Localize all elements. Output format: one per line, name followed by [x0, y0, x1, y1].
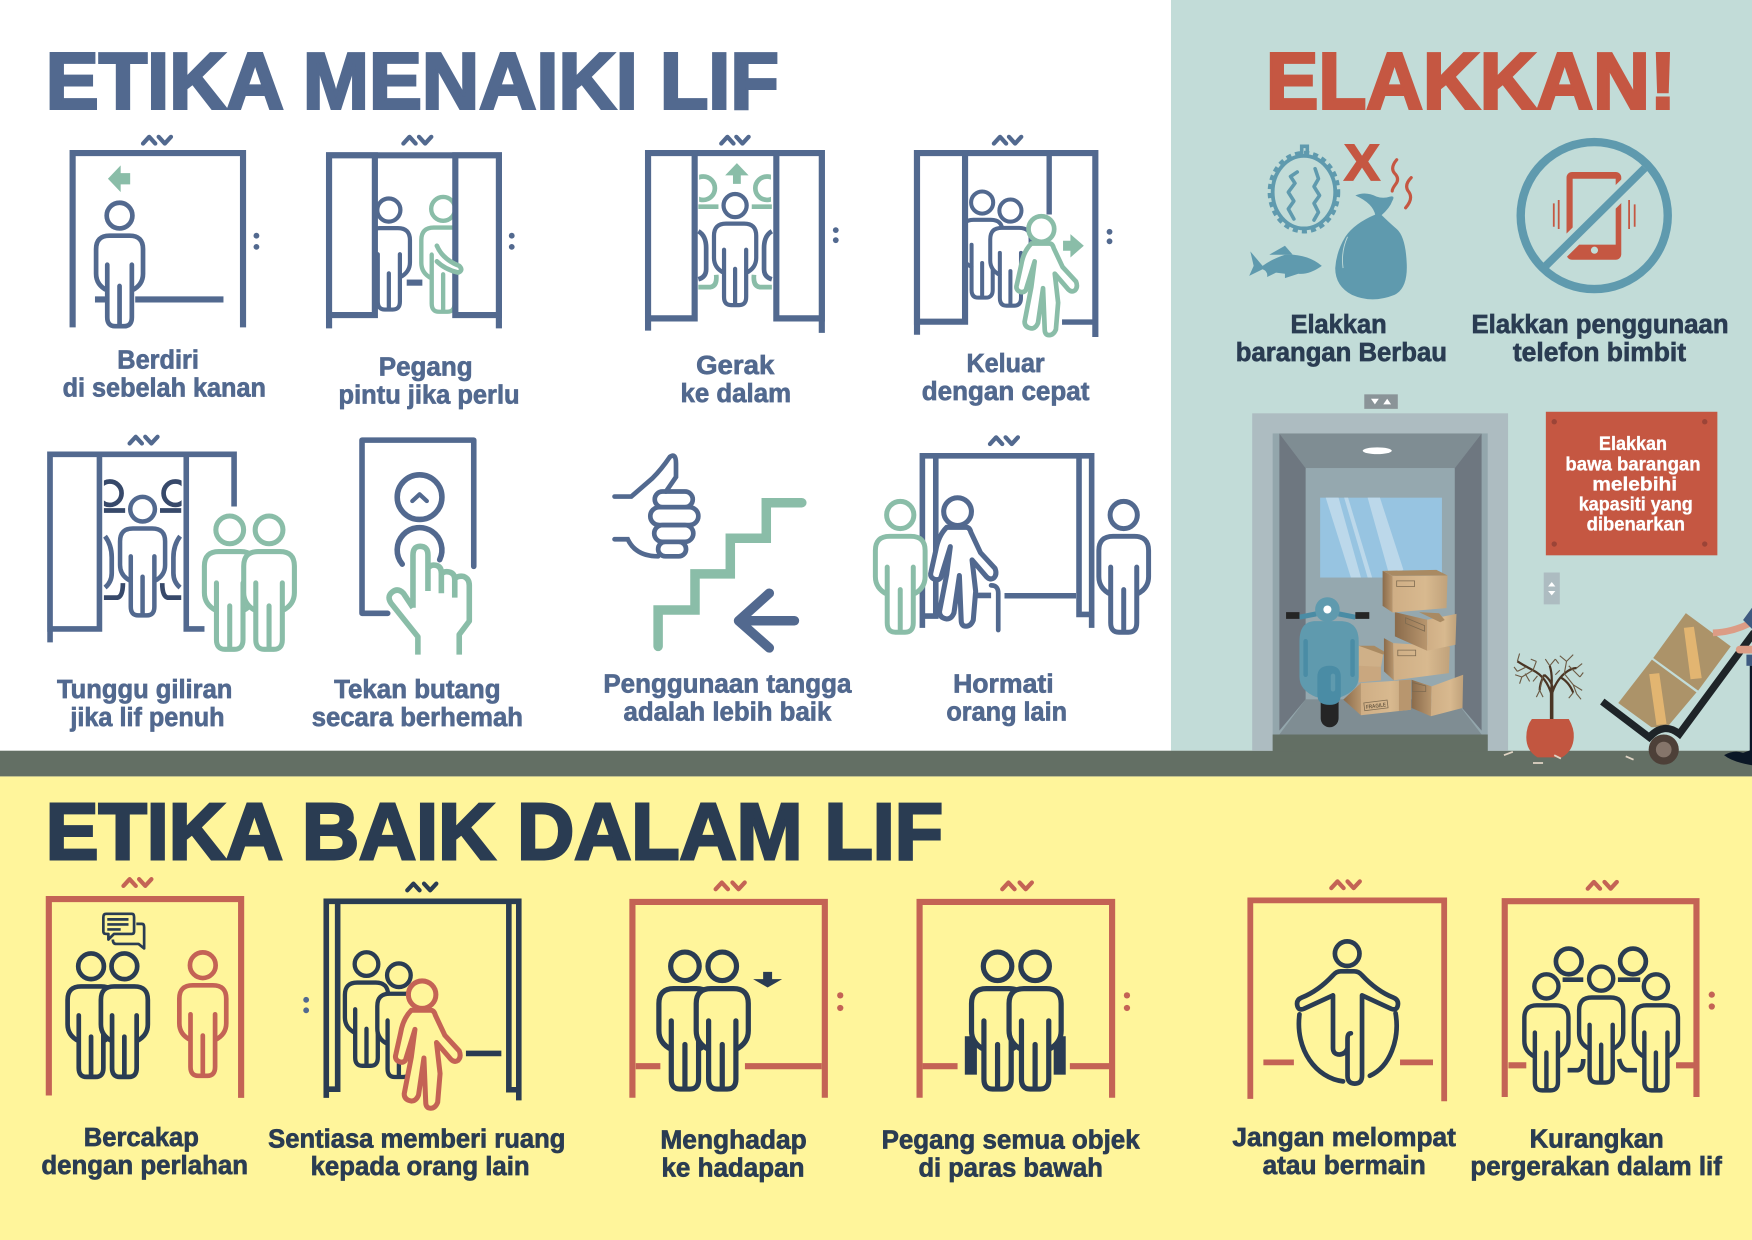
label: Menghadap: Menghadap: [660, 1126, 807, 1154]
icon: do not jump or play: [1250, 881, 1444, 1101]
icon: durian, fish and smelly bag: [1249, 133, 1411, 299]
potted plant: [1514, 654, 1583, 757]
label: Bercakap: [41, 1124, 248, 1180]
label: Pegang semua objek: [882, 1126, 1140, 1182]
label: Hormati: orang lain: [946, 699, 1067, 727]
label: elakkan penggunaan telefon: telefon bimbit: [1513, 339, 1687, 367]
label: Penggunaan: Penggunaan tangga: [603, 671, 852, 699]
icon: face forward: [632, 883, 843, 1098]
lift floor indicator: [1364, 394, 1398, 409]
label: Tunggu: Tunggu giliran: [57, 676, 232, 704]
title: Etika Baik Dalam Lif: ETIKA BAIK DALAM LIF: [46, 787, 943, 876]
panel: elakkan icons: [1236, 133, 1729, 367]
X mark: X: [1344, 133, 1380, 191]
label: Sentiasa: kepada orang lain: [311, 1153, 530, 1181]
label: elakkan barangan berbau: barangan Berbau: [1236, 339, 1447, 367]
warning sign: bawa barangan: [1565, 453, 1701, 475]
label: Pegang: [339, 353, 520, 409]
label: Pegang: pintu jika perlu: [339, 381, 520, 409]
labels: upper section: [57, 347, 1090, 732]
background: white panel: [0, 0, 1171, 751]
label: Berdiri: di sebelah kanan: [63, 375, 266, 403]
call button panel: [1544, 573, 1560, 604]
warning sign: Elakkan: [1599, 433, 1667, 455]
label: Pegang semua objek: di paras bawah: [918, 1154, 1103, 1182]
icon: move inside: [648, 137, 839, 333]
icon: respect others: [875, 437, 1149, 632]
label: Bercakap: dengan perlahan: [41, 1152, 248, 1180]
label: Sentiasa: Sentiasa memberi ruang: [268, 1125, 565, 1153]
lift door frame: [1252, 413, 1508, 751]
label: Bercakap: Bercakap: [84, 1124, 199, 1152]
warning sign: [1546, 412, 1717, 555]
panel: etika menaiki lif icons: [50, 137, 1149, 655]
label: Kurangkan: Kurangkan: [1530, 1125, 1664, 1153]
labels: lower section: [41, 1124, 1722, 1182]
label: Gerak: ke dalam: [680, 380, 791, 408]
label: Tekan: [312, 676, 523, 732]
background: yellow panel: [0, 776, 1752, 1240]
label: Jangan melompat: Jangan melompat: [1232, 1124, 1456, 1152]
warning sign: dibenarkan: [1587, 514, 1685, 536]
label: Hormati: [946, 671, 1067, 727]
label: Gerak: Gerak: [696, 352, 775, 380]
label: Berdiri: Berdiri: [117, 347, 199, 375]
label: Tekan: Tekan butang: [334, 676, 501, 704]
icon: hold the door: [329, 137, 515, 328]
label: Tunggu: [57, 676, 232, 732]
label: Hormati: Hormati: [953, 671, 1054, 699]
title: Etika Menaiki Lif: ETIKA MENAIKI LIF: [46, 36, 779, 125]
cigarette butts: [1504, 752, 1634, 763]
icon: reduce movement: [1505, 882, 1715, 1097]
box label: fragile: FRAGILE: [1366, 702, 1387, 711]
icon: stand on the right: [73, 137, 259, 327]
label: Tekan: secara berhemah: [312, 704, 523, 732]
background: teal panel: [1171, 0, 1752, 751]
label: Penggunaan: [603, 671, 852, 727]
scooter: [1286, 597, 1369, 727]
illustration: overloaded lift: [1252, 394, 1752, 765]
label: Keluar: dengan cepat: [922, 378, 1090, 406]
icon: hold items low: [920, 883, 1130, 1098]
icon: exit quickly: [917, 137, 1112, 337]
label: elakkan barangan berbau: [1236, 311, 1447, 367]
icon: speak softly: [49, 879, 241, 1098]
label: elakkan penggunaan telefon: Elakkan penggunaan: [1472, 311, 1729, 339]
icon: no mobile phone: [1521, 142, 1668, 289]
icon: press the button: [362, 440, 474, 655]
icon: wait your turn: [50, 437, 294, 649]
label: Keluar: [922, 350, 1090, 406]
panel: etika baik dalam lif icons: [49, 879, 1715, 1108]
label: Menghadap: ke hadapan: [661, 1154, 804, 1182]
label: Gerak: [680, 352, 791, 408]
label: Tunggu: jika lif penuh: [69, 704, 225, 732]
icon: chat bubbles: [103, 914, 144, 948]
title: Elakkan: ELAKKAN!: [1266, 36, 1676, 125]
warning sign: melebihi: [1592, 473, 1677, 495]
label: Kurangkan: pergerakan dalam lif: [1470, 1153, 1722, 1181]
background: ground strip: [0, 751, 1752, 776]
icon: give space: [303, 884, 519, 1108]
label: Jangan melompat: atau bermain: [1263, 1152, 1426, 1180]
label: Berdiri: [63, 347, 266, 403]
label: elakkan barangan berbau: Elakkan: [1291, 311, 1387, 339]
label: Keluar: Keluar: [967, 350, 1045, 378]
label: Penggunaan: adalah lebih baik: [623, 699, 832, 727]
label: Kurangkan: [1470, 1125, 1722, 1181]
cardboard boxes: [1343, 570, 1463, 716]
warning sign: kapasiti yang: [1579, 494, 1693, 516]
box label: fragile: [1364, 700, 1388, 711]
label: Pegang: Pegang: [379, 353, 473, 381]
label: Sentiasa: [268, 1125, 565, 1181]
label: Jangan melompat: [1232, 1124, 1456, 1180]
label: elakkan penggunaan telefon: [1472, 311, 1729, 367]
hand trolley with boxes: [1602, 608, 1752, 765]
label: Menghadap: [660, 1126, 807, 1182]
label: Pegang semua objek: Pegang semua objek: [882, 1126, 1140, 1154]
lift interior: [1273, 433, 1488, 751]
icon: stairs are better: [615, 456, 802, 648]
